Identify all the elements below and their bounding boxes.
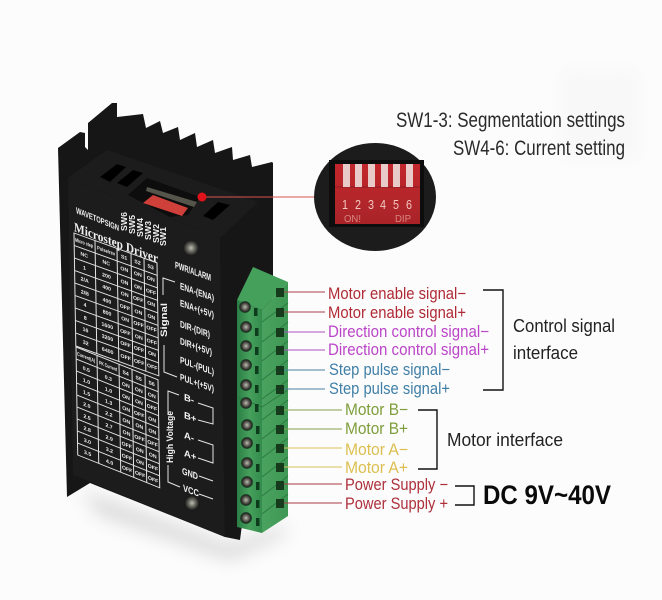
- microstep table: OFF: [146, 288, 157, 298]
- motor and power labels: [345, 401, 448, 513]
- microstep table: ON: [147, 275, 155, 284]
- switch numbers: 3: [368, 197, 374, 212]
- DIP switch inset: [314, 143, 436, 251]
- printed signal pin names: A+: [184, 448, 197, 463]
- control signal interface heading: [513, 316, 615, 363]
- current table: 2.9: [106, 435, 113, 443]
- microstep table: 4: [84, 302, 87, 309]
- printed signal pin names: A-: [184, 430, 194, 445]
- current table: 1.3: [105, 399, 112, 407]
- microstep table: OFF: [120, 303, 131, 313]
- current table: ON: [135, 399, 143, 408]
- microstep table: 3200: [102, 334, 113, 344]
- brand and title: WAVETOPSIGN: [76, 205, 119, 233]
- current table: 3.2: [106, 447, 113, 455]
- current table: Current(A): [77, 352, 95, 365]
- current table: 2.8: [84, 426, 91, 434]
- microstep table: OFF: [146, 325, 158, 335]
- microstep table: 200: [102, 272, 111, 281]
- current table: OFF: [134, 410, 145, 420]
- motor and power labels: Power Supply −: [345, 476, 448, 494]
- current table: ON: [122, 381, 130, 390]
- wire sockets: [276, 288, 284, 508]
- current table: OFF: [148, 475, 159, 485]
- control signal labels: Direction control signal−: [328, 323, 489, 341]
- printed signal pin names: PUL-(PUL): [180, 355, 214, 378]
- control signal labels: Step pulse signal−: [329, 361, 450, 379]
- switch names: SW3: [143, 221, 153, 240]
- switch numbers: DIP: [395, 214, 411, 225]
- current table: OFF: [134, 434, 145, 444]
- microstep table: 2/B: [81, 289, 89, 298]
- microstep table: OFF: [133, 295, 144, 305]
- microstep table: Pulse/rev: [97, 245, 115, 258]
- microstep table: ON: [134, 284, 142, 292]
- brand and title: Microstep Driver: [74, 219, 158, 266]
- switch names: SW5: [127, 215, 137, 234]
- microstep table: ON: [121, 291, 129, 299]
- heat sink: [58, 103, 273, 540]
- printed signal pin names: B-: [184, 392, 194, 407]
- motor and power labels: Motor B−: [345, 401, 408, 419]
- microstep table: S1: [121, 254, 127, 262]
- current table: 2.2: [105, 411, 113, 419]
- brand and title: [74, 205, 158, 266]
- switch numbers: ON!: [344, 214, 361, 225]
- device shadow: [80, 490, 285, 560]
- microstep table: ON: [148, 350, 156, 359]
- current table: ON: [136, 459, 144, 468]
- microstep table: [74, 233, 159, 376]
- microstep table: 6400: [102, 347, 114, 357]
- switch numbers: 6: [406, 197, 412, 212]
- switch names: SW1: [158, 227, 168, 246]
- microstep table: 2/A: [81, 276, 89, 285]
- microstep table: NC: [81, 251, 88, 260]
- current table: OFF: [135, 470, 146, 480]
- microstep table: OFF: [120, 353, 132, 363]
- front face: [68, 178, 225, 537]
- current table: ON: [136, 447, 144, 456]
- switch settings note: [396, 109, 625, 160]
- pin leader lines: [284, 292, 342, 503]
- vent slots: [100, 164, 230, 220]
- printed signal pin names: DIR-(DIR): [180, 319, 210, 341]
- printed signal pin names: GND: [182, 466, 198, 483]
- current table: ON: [148, 416, 156, 425]
- microstep table: ON: [121, 279, 129, 287]
- printed brackets: [163, 278, 213, 499]
- current table: ON: [122, 405, 130, 414]
- control signal interface heading: interface: [513, 343, 578, 363]
- microstep table: OFF: [133, 320, 145, 330]
- power bracket: [455, 486, 474, 505]
- microstep table: OFF: [147, 338, 158, 348]
- microstep table: ON: [135, 334, 143, 342]
- control signal labels: Direction control signal+: [328, 341, 489, 359]
- microstep table: NC: [103, 259, 110, 268]
- microstep table: OFF: [147, 363, 158, 373]
- microstep table: 1600: [101, 322, 113, 332]
- switch settings note: SW4-6: Current setting: [453, 137, 625, 160]
- printed signal pin names: VCC: [183, 483, 199, 500]
- DIP switch opening: [128, 178, 200, 217]
- microstep table: 400: [102, 284, 111, 293]
- microstep table: Micro step: [75, 237, 94, 250]
- microstep table: ON: [147, 300, 155, 309]
- printed signal pin names: PUL+(+5V): [180, 372, 214, 395]
- switch numbers: [342, 197, 412, 225]
- switch numbers: 4: [380, 197, 386, 212]
- microstep table: 800: [103, 309, 111, 318]
- control signal labels: Motor enable signal+: [328, 304, 466, 322]
- current table: S4: [122, 370, 129, 378]
- current table: ON: [135, 387, 143, 396]
- switch numbers: 2: [355, 197, 361, 212]
- microstep table: ON: [120, 266, 128, 274]
- current table: S6: [148, 380, 155, 388]
- switch levers: [343, 164, 413, 187]
- current table: ON: [148, 392, 156, 401]
- current table: 2.0: [83, 402, 91, 410]
- current table: OFF: [147, 403, 158, 413]
- microstep table: OFF: [120, 328, 131, 338]
- stepper driver device: [58, 103, 288, 540]
- control signal labels: Motor enable signal−: [328, 285, 466, 303]
- switch numbers: 5: [393, 197, 399, 212]
- printed signal pin names: B+: [184, 410, 197, 425]
- control signal bracket: [483, 290, 503, 390]
- switch names: SW2: [151, 224, 161, 243]
- microstep table: ON: [134, 271, 142, 279]
- current table: 1.5: [83, 390, 90, 398]
- current table: 1.0: [83, 378, 90, 386]
- current table: 0.5: [83, 366, 90, 374]
- current table: 2.7: [105, 423, 113, 431]
- switch names: SW4: [135, 218, 145, 237]
- switch names: SW6: [119, 212, 129, 231]
- current table: 3.0: [84, 438, 91, 446]
- current table: ON: [122, 393, 130, 402]
- current table: OFF: [122, 453, 133, 463]
- microstep table: 1: [83, 265, 86, 272]
- motor and power labels: Motor B+: [345, 420, 408, 438]
- printed signal pin names: High Voltage: [165, 411, 176, 463]
- current table: OFF: [122, 441, 133, 451]
- current table: ON: [122, 417, 130, 426]
- microstep table: S2: [134, 259, 141, 267]
- current table: [76, 347, 160, 488]
- microstep table: OFF: [134, 345, 145, 355]
- printed signal pin names: [159, 260, 214, 500]
- printed signal pin names: ENA+(+5V): [180, 298, 214, 321]
- current table: 3.5: [84, 450, 91, 458]
- microstep table: 400: [103, 297, 111, 306]
- microstep table: ON: [147, 313, 155, 322]
- green terminal block: [237, 267, 288, 533]
- control signal interface heading: Control signal: [513, 316, 615, 336]
- microstep table: OFF: [134, 358, 145, 368]
- current table: ON: [148, 428, 156, 437]
- microstep table: S3: [147, 264, 154, 272]
- switch names: [119, 212, 168, 246]
- current table: ON: [135, 423, 143, 432]
- current table: OFF: [122, 465, 133, 475]
- printed signal pin names: ENA-(ENA): [180, 281, 214, 304]
- terminal ribs: [237, 303, 288, 514]
- current table: ON: [149, 452, 157, 461]
- callout line and dot to DIP switch: [198, 192, 316, 202]
- voltage heading: DC 9V~40V: [483, 480, 611, 510]
- microstep table: 8: [84, 315, 87, 322]
- terminal screws: [240, 302, 252, 524]
- top face: [68, 150, 258, 238]
- current table: ON: [123, 429, 131, 438]
- motor and power labels: Motor A−: [345, 441, 408, 459]
- current table: 4.0: [106, 459, 113, 467]
- control signal labels: Step pulse signal+: [329, 380, 450, 398]
- current table: 0.3: [105, 375, 112, 383]
- microstep table: 32: [83, 340, 89, 348]
- motor and power labels: Power Supply +: [345, 495, 448, 513]
- motor interface bracket: [418, 410, 437, 469]
- microstep table: ON: [134, 309, 142, 317]
- current table: PK Current: [99, 360, 117, 373]
- printed signal pin names: PWR/ALARM: [175, 260, 211, 284]
- current table: S5: [135, 375, 142, 383]
- terminal small slots: [254, 308, 260, 526]
- motor interface heading: Motor interface: [447, 430, 563, 450]
- microstep table: ON: [121, 316, 129, 324]
- current table: OFF: [148, 463, 159, 473]
- current table: OFF: [147, 439, 158, 449]
- motor and power labels: Motor A+: [345, 459, 408, 477]
- control signal labels: [328, 285, 489, 398]
- current table: 1.0: [105, 387, 112, 395]
- microstep table: 16: [83, 327, 88, 335]
- mounting screws: [183, 240, 200, 510]
- printed signal pin names: DIR+(+5V): [180, 336, 212, 358]
- right side face: [220, 202, 258, 537]
- microstep table: OFF: [120, 340, 131, 350]
- printed signal pin names: Signal: [159, 303, 170, 337]
- switch numbers: 1: [342, 197, 348, 212]
- current table: 2.5: [83, 414, 91, 422]
